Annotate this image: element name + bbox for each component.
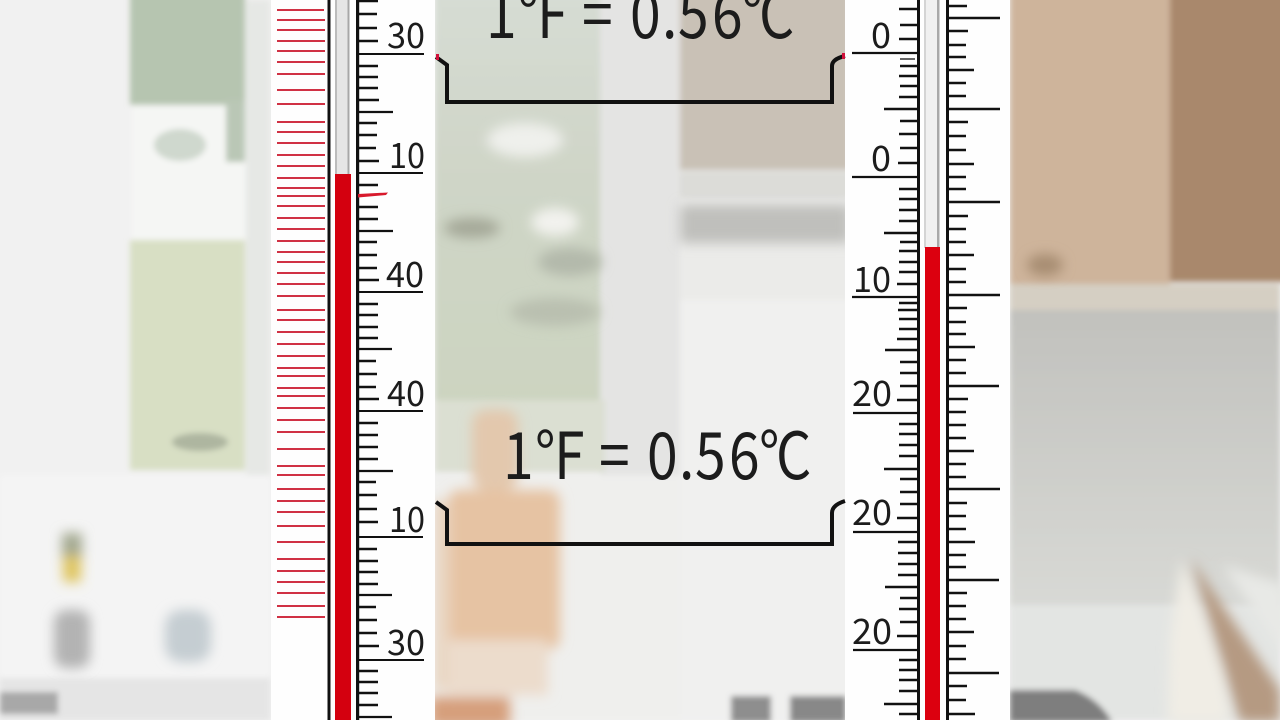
wooden board: [448, 490, 560, 650]
left mid ticks: [884, 109, 918, 704]
right object white: [1168, 558, 1230, 720]
board side tint: [434, 500, 450, 690]
scale labels: [852, 8, 892, 655]
scale labels: 20: [852, 366, 892, 417]
red fluid column: [925, 247, 940, 720]
blind grey band: [680, 205, 850, 243]
backsplash: [1010, 310, 1280, 605]
bracket: lower: [436, 501, 845, 544]
scale labels: [386, 8, 425, 666]
mid grey blob lower: [510, 298, 600, 326]
foliage blob: [154, 129, 206, 161]
sill: [0, 475, 270, 680]
scale labels: 10: [853, 252, 891, 303]
scale labels: 30: [387, 615, 425, 666]
jar: [165, 610, 211, 662]
scale spine: [356, 0, 359, 720]
cabinet dark: [1170, 0, 1280, 282]
mid ticks: [358, 112, 393, 717]
dark patch in lower pane: [172, 433, 228, 451]
panel background: [845, 0, 1010, 720]
right pale shape: [1222, 565, 1280, 655]
left thin tick: [900, 58, 915, 60]
under-cabinet light strip: [1010, 284, 1280, 310]
scale labels: 0: [871, 8, 891, 59]
long ticks: [358, 54, 424, 660]
window: left white gap: [132, 105, 247, 240]
scale labels: 20: [852, 485, 892, 536]
bracket: upper: [436, 53, 845, 102]
window: right edge of upper pane: [226, 100, 245, 162]
right long ticks: [947, 18, 1000, 673]
conversion label: lower: 1°F = 0.56°C: [503, 405, 811, 498]
right object shadow: [1190, 558, 1280, 720]
bottle neck: [62, 533, 82, 559]
counter dark object left: [0, 692, 58, 714]
window column: [600, 0, 680, 720]
scale labels: 0: [871, 131, 891, 182]
bottle label: [63, 556, 81, 582]
board base: [430, 697, 510, 720]
mid dark blob right: [538, 248, 602, 276]
grey blind upper band: [680, 172, 850, 198]
pale lower right of middle: [680, 170, 850, 720]
tube outer wall: [328, 0, 330, 720]
scale labels: 10: [389, 492, 425, 543]
red fahrenheit ticks: [277, 10, 325, 617]
counter right: [1010, 605, 1280, 720]
mid dark blob: [444, 218, 500, 238]
lower right of middle brightening: [680, 300, 850, 720]
scale labels: 40: [386, 247, 424, 298]
middle bottom dark items: [731, 696, 771, 720]
middle lower-left green: [435, 400, 605, 472]
mid pale patch: [487, 123, 563, 157]
scale labels: 20: [852, 604, 892, 655]
left long ticks: [852, 53, 918, 650]
red bracket tips: [436, 53, 845, 60]
right minor ticks: [947, 6, 968, 700]
panel: left thermometer: [271, 0, 435, 720]
glass tube: [336, 0, 349, 175]
scale spines: [917, 0, 920, 720]
window frame strip: [246, 0, 270, 720]
red stray tick: [358, 192, 388, 198]
cabinet light: [1010, 0, 1170, 285]
wooden board handle: [472, 410, 518, 490]
bottle body: [54, 610, 90, 668]
minor ticks: [358, 1, 379, 705]
window: left lower pane: [130, 240, 245, 470]
window: left upper pane: [130, 0, 245, 105]
right dark counter item: [1010, 690, 1112, 720]
scale labels: 40: [387, 366, 425, 417]
scale labels: 10: [389, 128, 425, 179]
beige upper right of middle: [680, 0, 850, 170]
glass tube: [924, 0, 939, 248]
left minor ticks: [897, 9, 918, 714]
scale labels: 30: [387, 8, 425, 59]
panel: right thermometer: [845, 0, 1010, 720]
middle green pane: [435, 0, 600, 410]
right mid ticks: [947, 70, 975, 714]
mid bright blob: [531, 208, 579, 236]
red fluid column: [335, 174, 351, 720]
counter band left: [0, 678, 270, 720]
board lower fade: [448, 640, 548, 695]
middle lower band: [435, 475, 680, 720]
panel background: [271, 0, 435, 720]
cabinet handle: [1027, 254, 1063, 276]
